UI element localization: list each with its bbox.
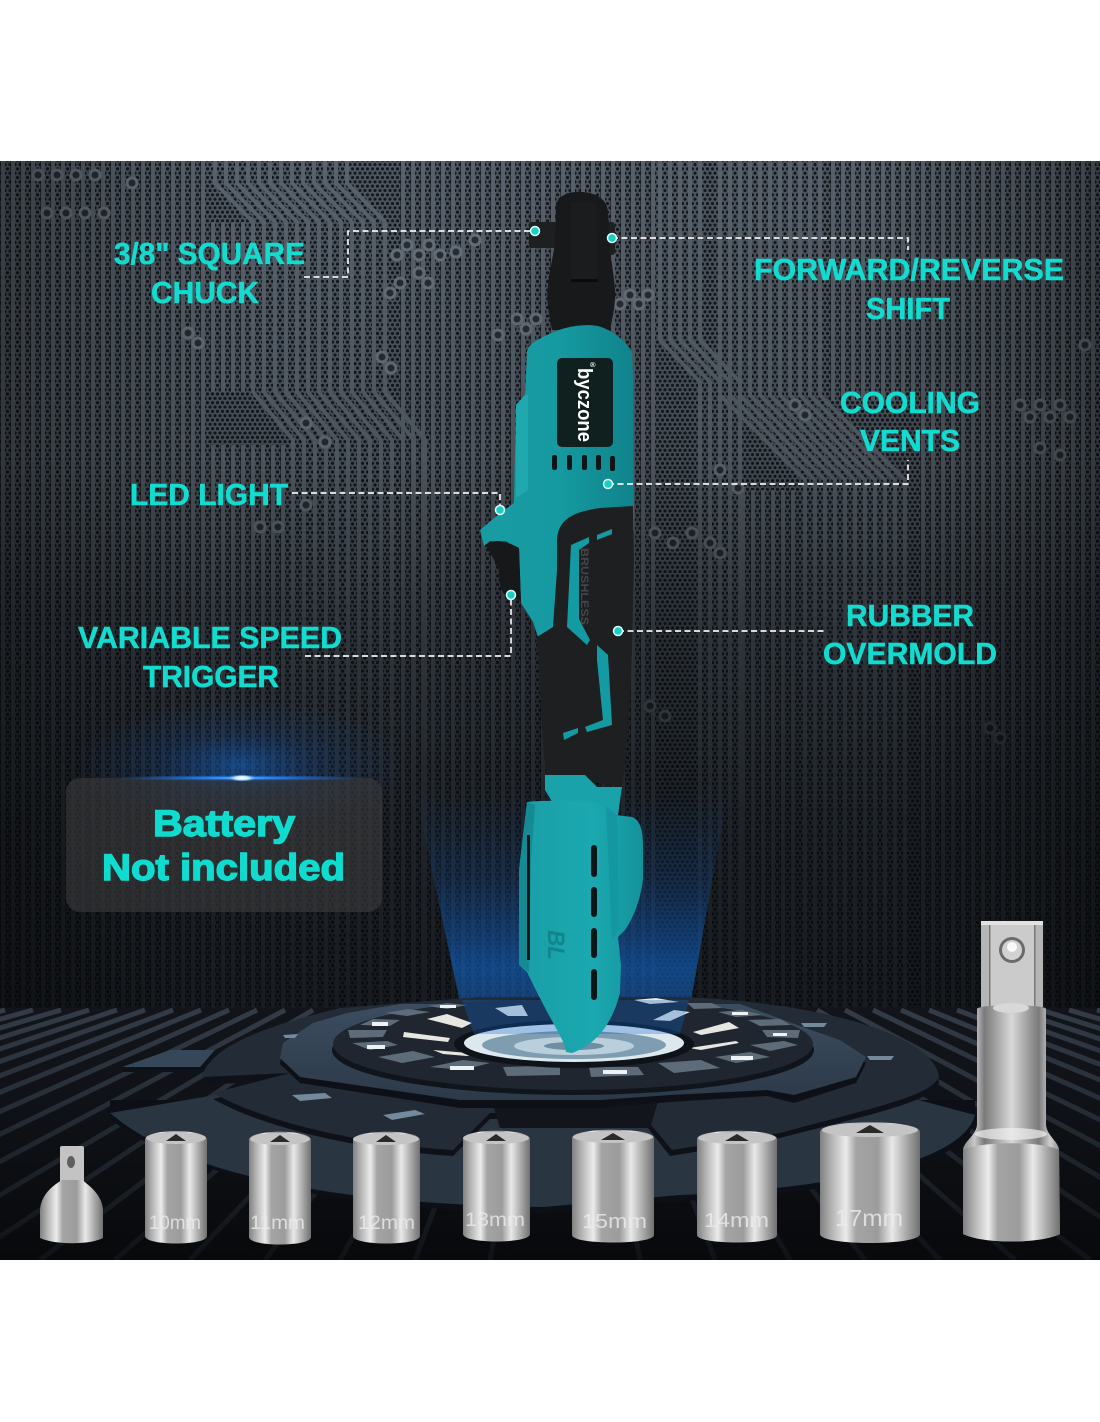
platform: circular pedestal bbox=[110, 997, 975, 1213]
icon: 15mm socket: 15mm bbox=[582, 1211, 647, 1233]
label: forward reverse shift: FORWARD/REVERSE bbox=[754, 252, 1064, 287]
blue light beam bbox=[415, 790, 728, 1012]
icon: 14mm socket bbox=[697, 1131, 777, 1242]
icon: 17mm socket: 17mm bbox=[835, 1205, 903, 1231]
icon: 10mm socket bbox=[145, 1131, 207, 1244]
label: cooling vents: VENTS bbox=[860, 423, 960, 458]
label: rubber overmold: RUBBER bbox=[846, 598, 974, 633]
battery base: BL bbox=[542, 930, 569, 960]
battery base bbox=[519, 775, 643, 1053]
icon: 15mm socket bbox=[572, 1130, 654, 1242]
label: variable speed trigger: TRIGGER bbox=[143, 659, 279, 694]
icon: socket extension bar bbox=[963, 921, 1060, 1242]
callout: LED light leader bbox=[292, 493, 504, 514]
central pedestal block bbox=[490, 1095, 660, 1128]
tool body bbox=[480, 325, 634, 642]
glow above battery note bbox=[75, 700, 405, 830]
middle plate bbox=[202, 997, 939, 1156]
icon: 11mm socket bbox=[249, 1132, 311, 1244]
label: variable speed trigger: VARIABLE SPEED bbox=[78, 620, 342, 655]
callout: rubber overmold leader bbox=[614, 626, 825, 636]
small tiles bbox=[283, 1023, 894, 1120]
icon: ratchet wrench tool bbox=[480, 192, 643, 1053]
icon: 10mm socket: 10mm bbox=[149, 1213, 201, 1234]
ratchet head bbox=[529, 192, 615, 330]
logo plate: byczone bbox=[573, 368, 595, 442]
icon: 13mm socket: 13mm bbox=[465, 1210, 525, 1231]
logo plate: ® bbox=[588, 362, 596, 368]
icon: 13mm socket bbox=[463, 1131, 530, 1242]
platform light tiles bbox=[348, 998, 800, 1077]
callout: battery not included: Battery bbox=[153, 803, 295, 844]
label: LED light: LED LIGHT bbox=[130, 477, 288, 512]
callout: square chuck leader bbox=[304, 226, 540, 277]
label: 3/8 square chuck: CHUCK bbox=[151, 275, 260, 310]
lowest plate bbox=[110, 1095, 975, 1213]
label: 3/8 square chuck: 3/8" SQUARE bbox=[114, 236, 305, 271]
callout: forward reverse leader bbox=[608, 234, 908, 250]
blue ring bbox=[280, 1004, 866, 1108]
label: 3/8 square chuck bbox=[114, 236, 305, 310]
icon: 17mm socket bbox=[820, 1122, 920, 1243]
platform glass centre bbox=[454, 1020, 694, 1068]
label: cooling vents bbox=[840, 385, 980, 458]
panel: circuit board background bbox=[0, 161, 1100, 1260]
label: rubber overmold: OVERMOLD bbox=[823, 636, 997, 671]
dark tile ring bbox=[332, 998, 814, 1095]
callout: trigger leader bbox=[305, 590, 516, 656]
beam tint over platform bbox=[462, 1000, 689, 1034]
icon: 12mm socket: 12mm bbox=[358, 1213, 415, 1234]
logo plate bbox=[557, 358, 613, 447]
callout: cooling vents leader bbox=[604, 460, 908, 488]
left floating tile bbox=[122, 1050, 215, 1072]
grip teal accents bbox=[563, 529, 612, 740]
label: forward reverse shift: SHIFT bbox=[866, 291, 950, 326]
icon: 14mm socket: 14mm bbox=[704, 1210, 769, 1232]
label: forward reverse shift bbox=[754, 252, 1064, 326]
trigger bbox=[486, 542, 521, 601]
label: cooling vents: COOLING bbox=[840, 385, 980, 420]
vent slots bbox=[552, 455, 615, 471]
icon: 12mm socket bbox=[353, 1132, 420, 1244]
panel: perspective floor bbox=[0, 1008, 1100, 1260]
icon: drive adapter bbox=[40, 1146, 103, 1243]
grip text: BRUSHLESS bbox=[578, 548, 590, 625]
icon: 11mm socket: 11mm bbox=[250, 1213, 305, 1234]
callout: battery not included: Not included bbox=[102, 847, 345, 888]
callout: battery not included bbox=[66, 774, 382, 912]
label: rubber overmold bbox=[823, 598, 997, 671]
rubber grip bbox=[537, 506, 634, 787]
label: variable speed trigger bbox=[78, 620, 342, 694]
